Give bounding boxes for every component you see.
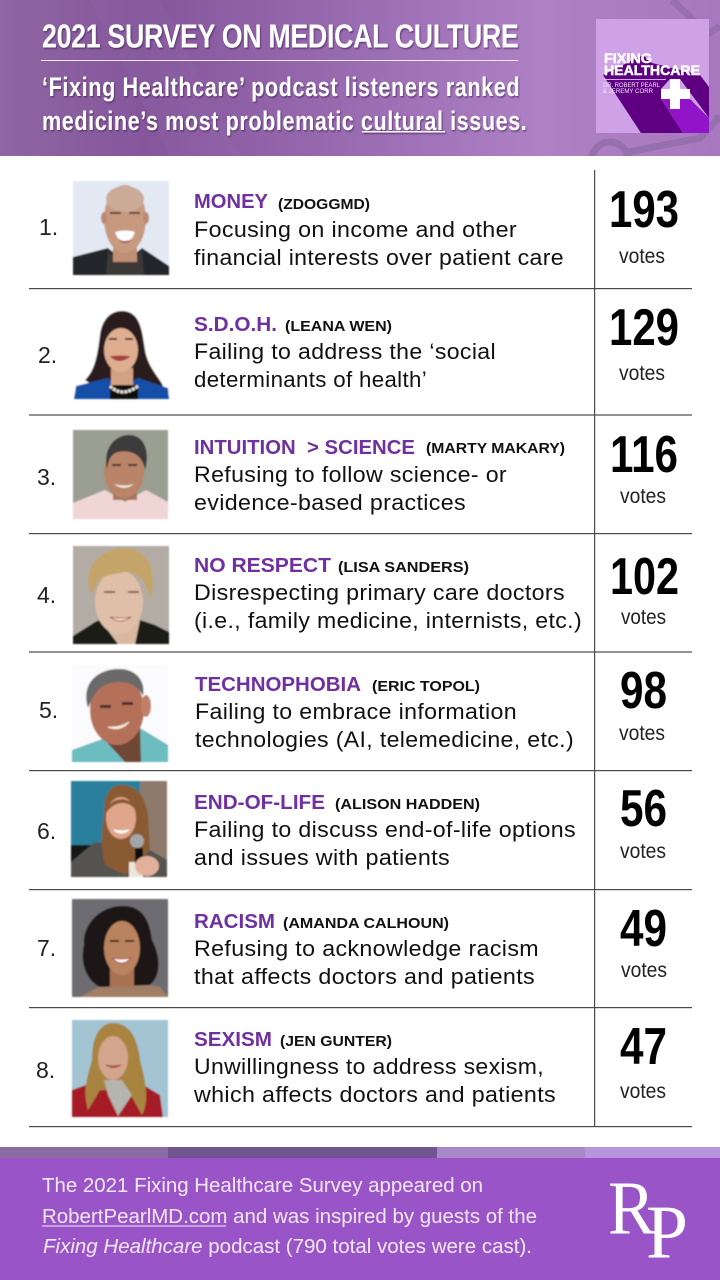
row 4: no respect [37,546,679,644]
row 3: intuition: 3. [37,464,56,490]
portrait: Amanda Calhoun [72,899,168,997]
RP logo: R [608,1166,655,1250]
label: no respect: (LISA SANDERS) [338,559,469,576]
votes: 47: votes [620,1080,666,1103]
description [194,936,539,989]
label: intuition [194,437,565,459]
description: which affects doctors and patients [193,1082,556,1107]
podcast cover: HEALTHCARE [604,62,700,78]
footer text: The 2021 Fixing Healthcare Survey appeared on [42,1175,483,1197]
label: end of life: END-OF-LIFE [194,792,325,814]
label: sexism: SEXISM [194,1029,272,1051]
portrait: Eric Topol [72,665,168,762]
podcast cover: & JEREMY CORR [603,89,654,95]
votes: 116: votes [620,485,666,508]
votes: 193: 193 [609,181,679,239]
label: racism [194,911,449,933]
row 2: sdoh [38,299,679,399]
votes: 129: votes [619,362,665,385]
row 4: no respect: 4. [37,582,56,608]
label: intuition: INTUITION > SCIENCE [194,437,415,459]
footer text: Fixing Healthcare podcast (790 total votes were cast). [43,1236,532,1258]
row 2: sdoh: 2. [38,342,57,368]
row 6: end of life [37,780,667,877]
description: evidence-based practices [194,490,466,515]
portrait: Lisa Sanders [73,546,169,644]
row 5: technophobia [39,662,667,762]
description: Failing to embrace information [195,699,517,724]
label: sexism: (JEN GUNTER) [280,1033,392,1050]
votes: 49 [620,900,667,982]
description [194,817,576,870]
votes: 56 [620,780,667,863]
description [194,217,564,270]
label: racism: (AMANDA CALHOUN) [283,915,449,932]
description: Failing to discuss end-of-life options [194,817,576,842]
portrait: Leana Wen [74,310,169,399]
label: racism: RACISM [194,911,275,933]
votes: 98 [619,662,667,745]
votes: 102: 102 [610,548,679,606]
description: financial interests over patient care [194,245,564,270]
label: end of life: (ALISON HADDEN) [335,796,480,813]
footer text [42,1175,537,1258]
row 3: intuition [37,426,678,519]
votes: 193: votes [619,245,665,268]
row 6: end of life: 6. [37,818,56,844]
footer strip [0,1147,720,1158]
votes: 49: 49 [620,900,667,958]
label: technophobia: (ERIC TOPOL) [372,678,480,695]
podcast cover [596,19,709,133]
votes: 129 [609,299,679,385]
RP logo [608,1166,688,1274]
label: sdoh [194,314,392,336]
description: Unwillingness to address sexism, [194,1054,544,1079]
votes: 129: 129 [609,299,679,357]
label: money [194,191,370,213]
description: Disrespecting primary care doctors [194,580,565,605]
row 7: racism [37,899,667,997]
votes: 116 [610,426,678,508]
label: no respect [194,555,469,577]
votes: 49: votes [621,959,667,982]
description: technologies (AI, telemedicine, etc.) [195,727,574,752]
row 1: money [39,181,679,275]
label: sexism [194,1029,392,1051]
footer text: RobertPearlMD.com and was inspired by guests of the [42,1206,537,1228]
portrait: Alison Hadden [71,781,167,877]
description: Failing to address the ‘social [194,339,496,364]
label: end of life [194,792,480,814]
portrait: Jen Gunter [72,1020,168,1117]
description: Refusing to follow science- or [194,462,507,487]
label: no respect: NO RESPECT [194,555,331,577]
votes: 98: votes [619,722,665,745]
votes: 98: 98 [620,662,667,720]
label: sdoh: (LEANA WEN) [285,318,392,335]
row 8: sexism: 8. [36,1057,55,1083]
label: sdoh: S.D.O.H. [194,314,277,336]
subtitle [42,73,527,137]
votes: 56: votes [620,840,666,863]
portrait: ZDoggMD [73,181,169,275]
description: determinants of health’ [194,367,427,392]
row 7: racism: 7. [37,935,56,961]
description: Refusing to acknowledge racism [194,936,539,961]
votes: 47 [620,1018,667,1103]
row 5: technophobia: 5. [39,697,58,723]
table rules [29,170,692,1127]
subtitle: medicine’s most problematic cultural issues. [42,107,527,137]
row 1: money: 1. [39,214,58,240]
description [193,1054,556,1107]
label: intuition: (MARTY MAKARY) [426,440,565,457]
title: 2021 SURVEY ON MEDICAL CULTURE [42,19,519,55]
portrait: Marty Makary [73,430,168,519]
row 8: sexism [36,1018,667,1117]
description [195,699,574,752]
votes: 116: 116 [610,426,678,484]
label: money: (ZDOGGMD) [278,196,370,213]
podcast cover: DR. ROBERT PEARL [603,83,661,89]
votes: 193 [609,181,679,268]
votes: 102: votes [621,606,666,629]
subtitle: ‘Fixing Healthcare’ podcast listeners ranked [42,73,520,103]
description: Focusing on income and other [194,217,517,242]
RP logo: P [646,1190,688,1274]
description [194,339,496,392]
footer panel [0,1158,720,1280]
header banner [0,0,720,156]
votes: 102 [610,548,679,629]
description: that affects doctors and patients [194,964,535,989]
label: technophobia: TECHNOPHOBIA [195,674,361,696]
label: money: MONEY [194,191,269,213]
description: and issues with patients [194,845,450,870]
description [194,462,507,515]
description [194,580,582,633]
description: (i.e., family medicine, internists, etc.) [194,608,582,633]
label: technophobia [195,674,480,696]
votes: 47: 47 [620,1018,667,1076]
votes: 56: 56 [620,780,667,838]
podcast cover: FIXING [604,50,652,66]
